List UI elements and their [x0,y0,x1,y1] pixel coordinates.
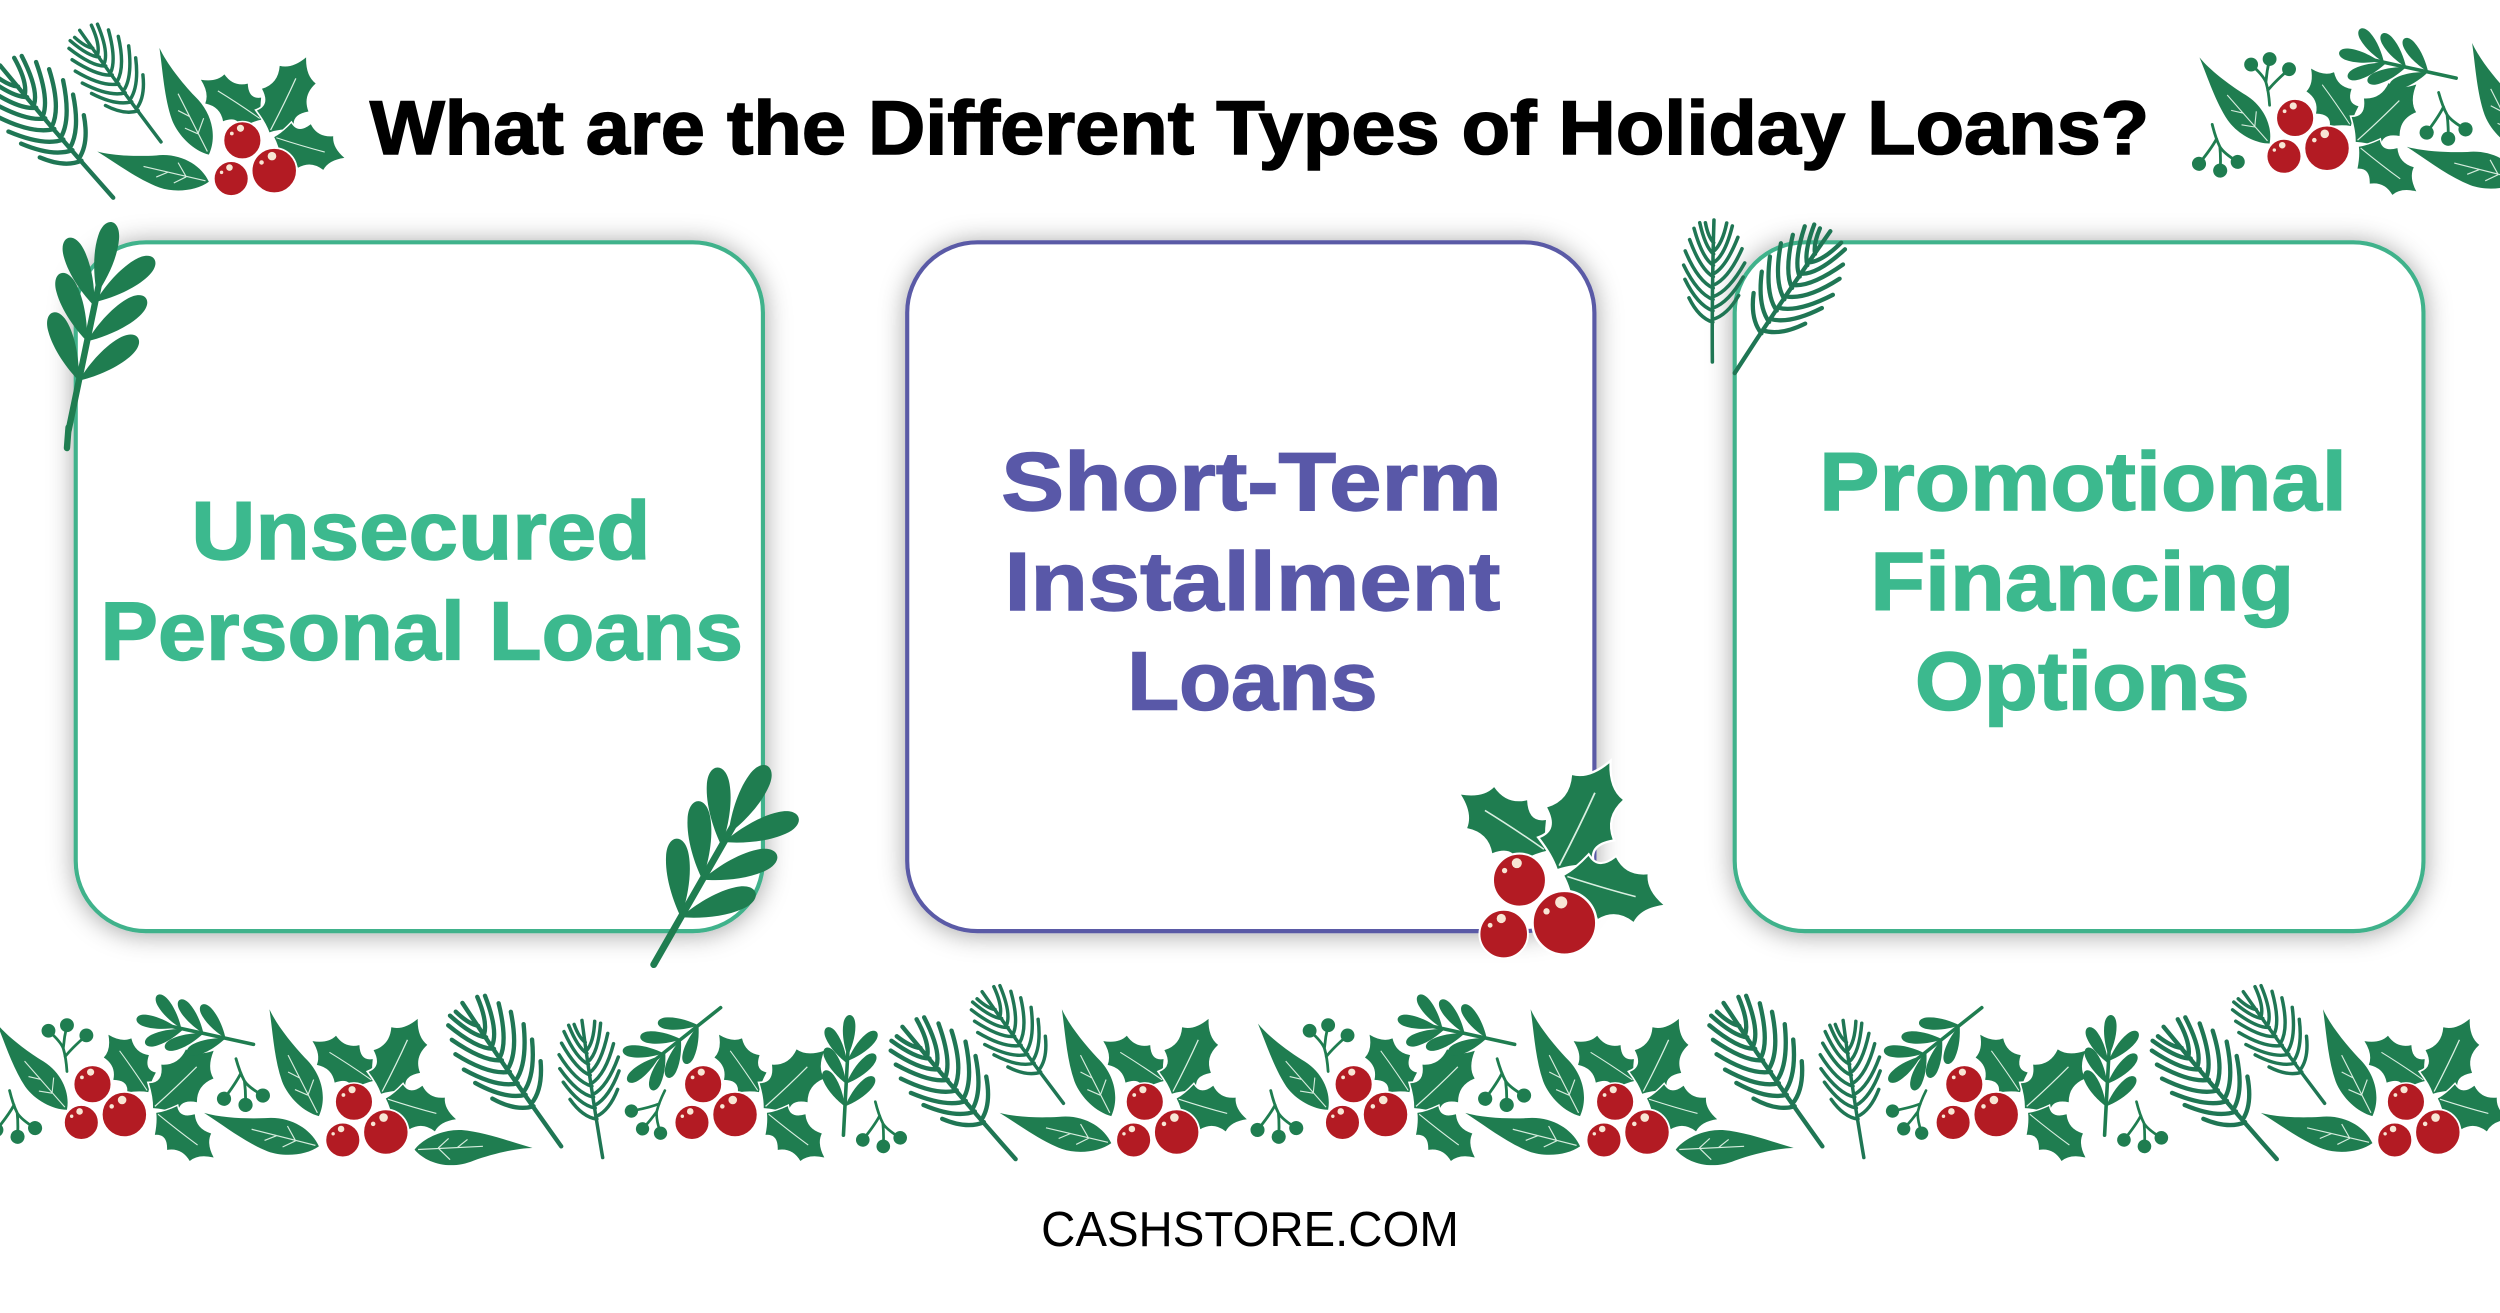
heading: short-term installment loans: Short-Term [1001,435,1502,528]
heading: promotional financing options: Promotional [1819,435,2347,528]
title: What are the Different Types of Holiday Loans? [370,86,2149,171]
heading: unsecured personal loans: Unsecured [191,484,651,577]
heading: short-term installment loans: Loans [1127,635,1378,728]
decoration: top-right holly garland [2186,8,2500,217]
heading: promotional financing options: Financing [1870,535,2294,628]
footer: website: CASHSTORE.COM [1041,1202,1459,1257]
icon: sprig on card 1 top-left corner [21,212,168,448]
icon: pine sprigs on card 3 corner [1683,211,1862,394]
heading: short-term installment loans: Installment [1004,535,1500,628]
panel: unsecured personal loans [76,242,763,931]
panel: short-term installment loans [907,242,1594,931]
heading: promotional financing options [1819,435,2347,728]
decoration: top-left holly garland [0,12,351,221]
decoration: bottom holly garland [0,974,2500,1183]
heading: short-term installment loans [1001,435,1502,728]
icon: holly and berries on card 2 corner [1444,747,1672,958]
heading: unsecured personal loans [100,484,743,677]
heading: promotional financing options: Options [1915,635,2250,728]
panel: promotional financing options [1735,242,2423,931]
heading: unsecured personal loans: Personal Loans [100,584,743,677]
icon: sprig on card 1 bottom-right corner [608,740,821,995]
